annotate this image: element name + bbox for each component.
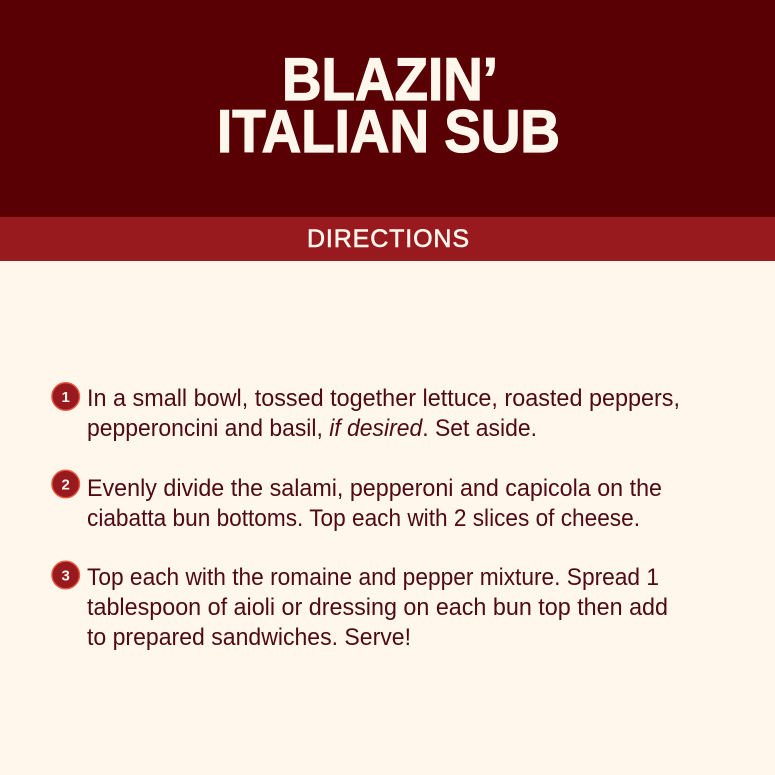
step 1 text xyxy=(87,385,680,442)
step 1 text: In a small bowl, tossed together lettuce, roasted peppers, xyxy=(87,385,680,412)
step 3 text: tablespoon of aioli or dressing on each bun top then add xyxy=(87,594,668,621)
icon: number 3 badge xyxy=(52,561,80,589)
step 3 text xyxy=(87,564,668,651)
step 2 text: Evenly divide the salami, pepperoni and capicola on the xyxy=(87,475,662,502)
step 2 xyxy=(52,470,662,532)
step 2 text xyxy=(87,475,662,532)
icon: number 1 badge: 1 xyxy=(62,389,70,406)
step 1 text: pepperoncini and basil, if desired. Set aside. xyxy=(87,415,537,442)
icon: number 3 badge: 3 xyxy=(62,567,70,584)
icon: number 2 badge xyxy=(52,470,80,498)
header panel xyxy=(0,0,775,217)
title xyxy=(217,46,560,165)
step 1 xyxy=(52,383,680,442)
directions heading: DIRECTIONS xyxy=(307,225,469,253)
icon: number 2 badge: 2 xyxy=(62,476,70,493)
step 2 text: ciabatta bun bottoms. Top each with 2 slices of cheese. xyxy=(87,505,640,532)
step 3 text: Top each with the romaine and pepper mixture. Spread 1 xyxy=(87,564,659,591)
step 3 text: to prepared sandwiches. Serve! xyxy=(87,624,411,651)
directions band xyxy=(0,217,775,261)
title: BLAZIN’ xyxy=(282,46,498,113)
step 3 xyxy=(52,561,668,651)
icon: number 1 badge xyxy=(52,383,80,410)
title: ITALIAN SUB xyxy=(217,98,560,165)
